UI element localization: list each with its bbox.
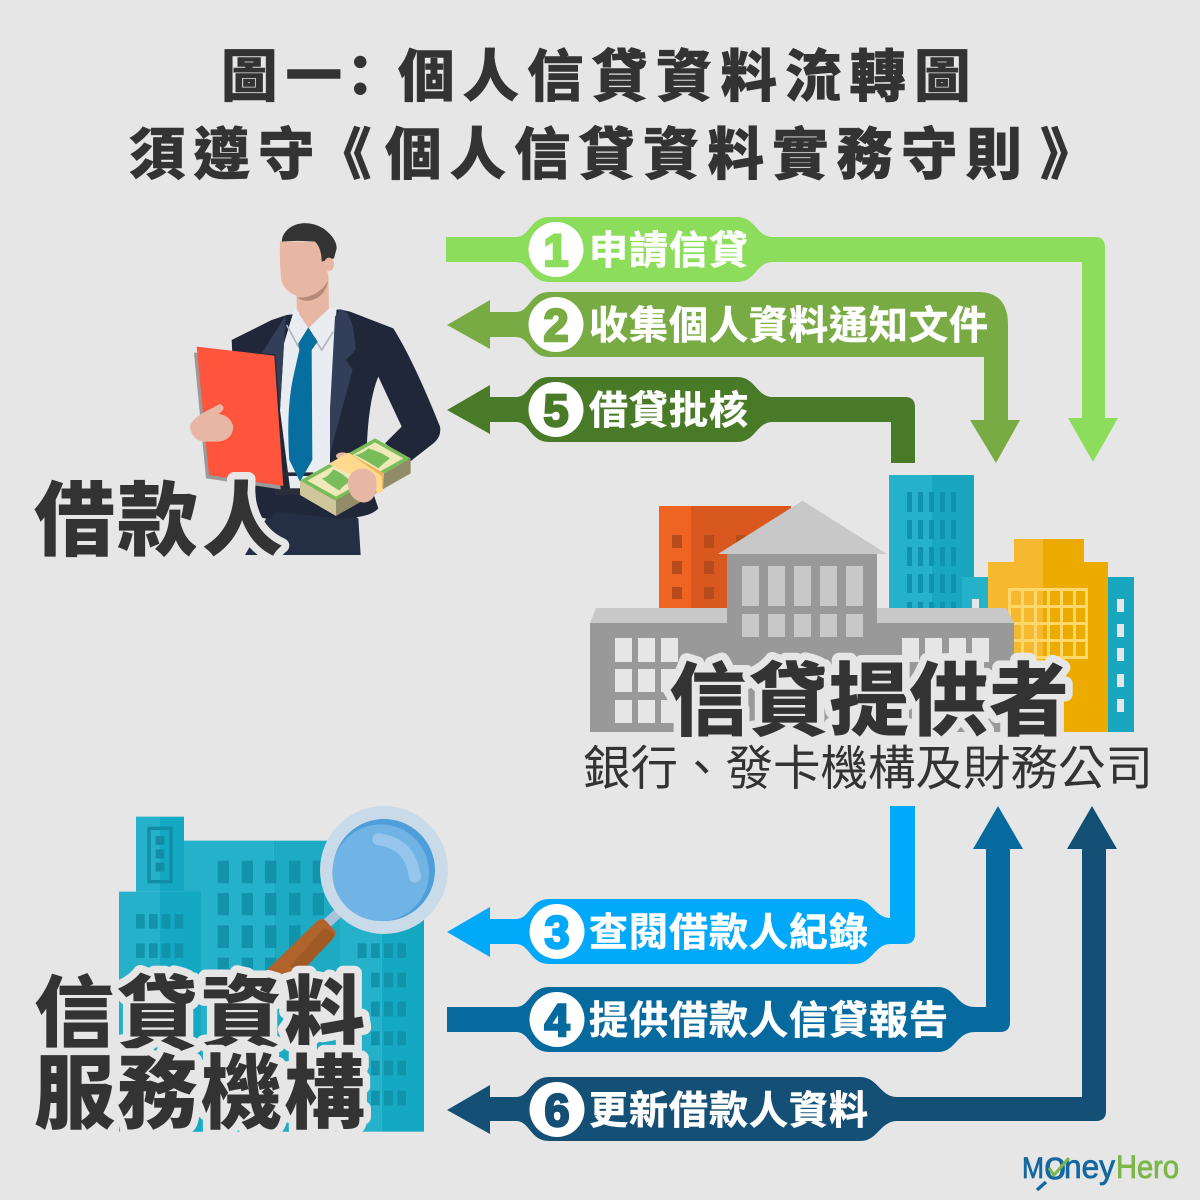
label: credit provider: 信貸提供者 [669, 657, 1069, 746]
shirt [280, 307, 337, 488]
paper band [328, 453, 384, 493]
title line 1: 圖一：個人信貸資料流轉圖 [221, 45, 970, 108]
red folder [197, 347, 283, 486]
arrow 3: check borrower records [447, 806, 915, 964]
hand on folder [190, 404, 233, 442]
logo: MoneyHero: Hero [1116, 1149, 1179, 1185]
arrow 5: loan approval: 借貸批核 [589, 390, 749, 433]
cash bundle [300, 481, 336, 516]
arrow 1: loan application: 1 [543, 225, 569, 276]
trousers [245, 493, 361, 555]
logo: MoneyHero: o [1044, 1144, 1066, 1188]
illustration: credit reference agency building with magnifier [119, 806, 448, 1132]
illustration: credit provider buildings [590, 475, 1134, 732]
arrow 6: update borrower data: 更新借款人資料 [589, 1090, 869, 1133]
arrow 2: collect personal data notice: 收集個人資料通知文件 [589, 305, 989, 348]
ear [324, 258, 334, 271]
arrow 5: loan approval: 5 [543, 385, 569, 436]
logo: MoneyHero: ney [1064, 1148, 1115, 1185]
left wing [119, 892, 160, 1132]
collar lines [287, 325, 333, 350]
right teal building [1108, 577, 1134, 732]
tie [288, 327, 318, 482]
arrow 3: check borrower records: 查閱借款人紀錄 [589, 912, 869, 955]
belt [275, 472, 313, 495]
magnifier lens [320, 806, 448, 934]
orange building [659, 506, 791, 624]
windows [136, 861, 406, 1105]
neck [297, 273, 329, 330]
label: borrower: 借款人 [34, 477, 283, 567]
arrow 4: provide credit report: 提供借款人信貸報告 [589, 1000, 949, 1043]
arrow 1: loan application: 申請信貸 [589, 230, 749, 273]
hand on cash [348, 468, 377, 503]
main block [184, 841, 273, 1132]
jacket [232, 309, 440, 519]
head [280, 242, 328, 297]
thumb [336, 452, 349, 460]
right block [340, 900, 382, 1132]
arrow 3: check borrower records: 3 [544, 907, 570, 958]
blue tower [889, 475, 989, 610]
title line 2: 須遵守《個人信貸資料實務守則》 [129, 123, 1096, 186]
lapels [262, 309, 356, 453]
bank wings [590, 608, 1014, 732]
note motifs [322, 448, 390, 491]
arrow 2: collect personal data notice [447, 292, 1020, 463]
illustration: borrower with folder and cash [190, 223, 440, 555]
arrow 1: loan application [446, 217, 1118, 462]
arrow 6: update borrower data: 6 [544, 1085, 570, 1136]
label: credit reference agency: 信貸資料 [34, 971, 365, 1061]
hair [282, 223, 337, 262]
folder shadow [194, 353, 281, 489]
arrow 4: provide credit report [447, 806, 1023, 1052]
top tower [136, 817, 160, 892]
chin shadow [297, 281, 328, 301]
arrow 5: loan approval [447, 377, 915, 463]
yellow building [988, 539, 1108, 732]
magnifier handle [325, 910, 342, 925]
logo: MoneyHero: M [1022, 1152, 1044, 1185]
arrow 4: provide credit report: 4 [544, 995, 570, 1046]
sublabel: banks, card issuers and finance companies: 銀行、發卡機構及財務公司 [583, 743, 1153, 796]
arrow 6: update borrower data [447, 806, 1117, 1141]
arrow 2: collect personal data notice: 2 [543, 300, 569, 351]
label: credit reference agency [34, 971, 365, 1140]
bank central hall [718, 501, 887, 637]
logo: MoneyHero [1022, 1144, 1179, 1190]
label: credit reference agency: 服務機構 [34, 1050, 365, 1140]
